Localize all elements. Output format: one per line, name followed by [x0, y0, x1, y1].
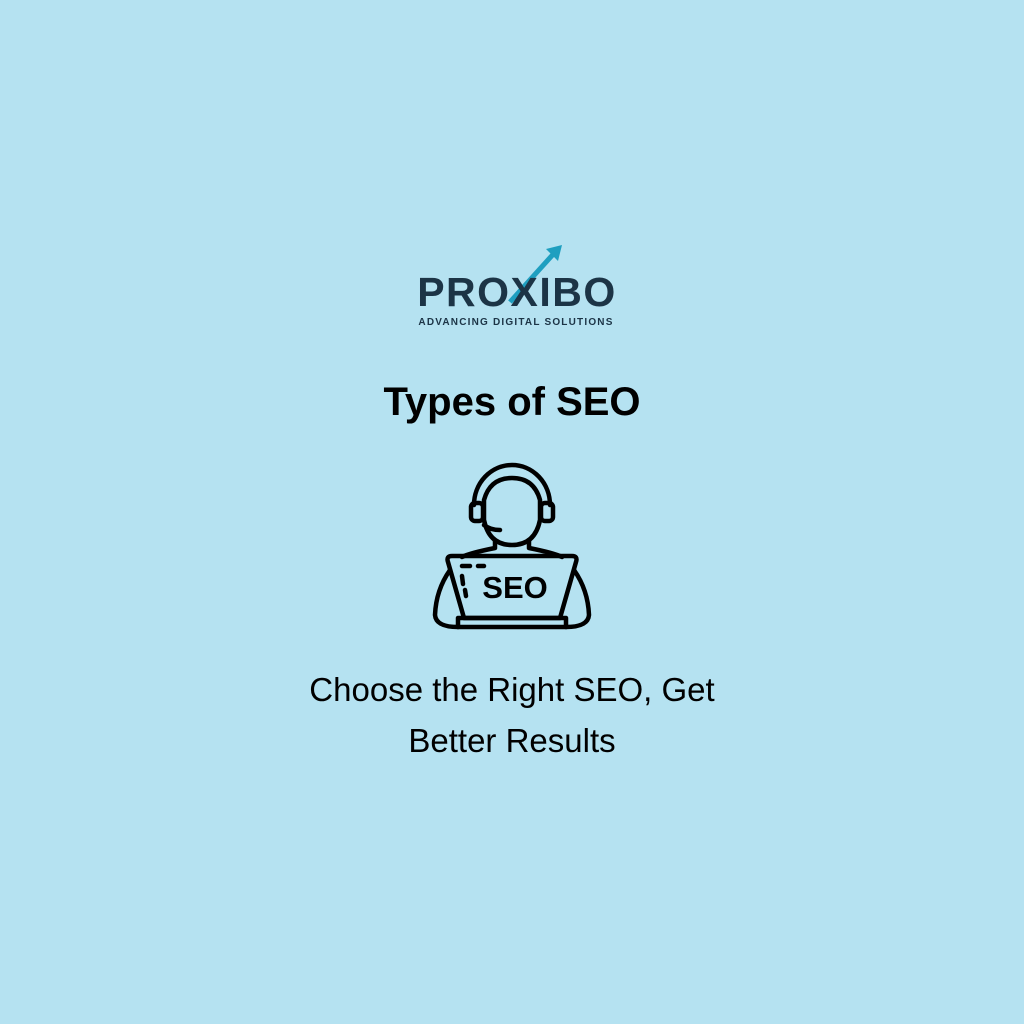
icon: person with laptop SEO: SEO — [482, 570, 548, 605]
icon: person with laptop SEO — [432, 462, 592, 630]
subtitle: Choose the Right SEO, Get — [309, 671, 715, 708]
title: Types of SEO — [383, 380, 641, 424]
logo — [417, 245, 617, 328]
logo arrow — [508, 245, 562, 304]
subtitle: Better Results — [408, 722, 616, 759]
subtitle — [309, 671, 715, 759]
wordmark: PROXIBO — [417, 269, 617, 315]
tagline: ADVANCING DIGITAL SOLUTIONS — [418, 317, 614, 328]
